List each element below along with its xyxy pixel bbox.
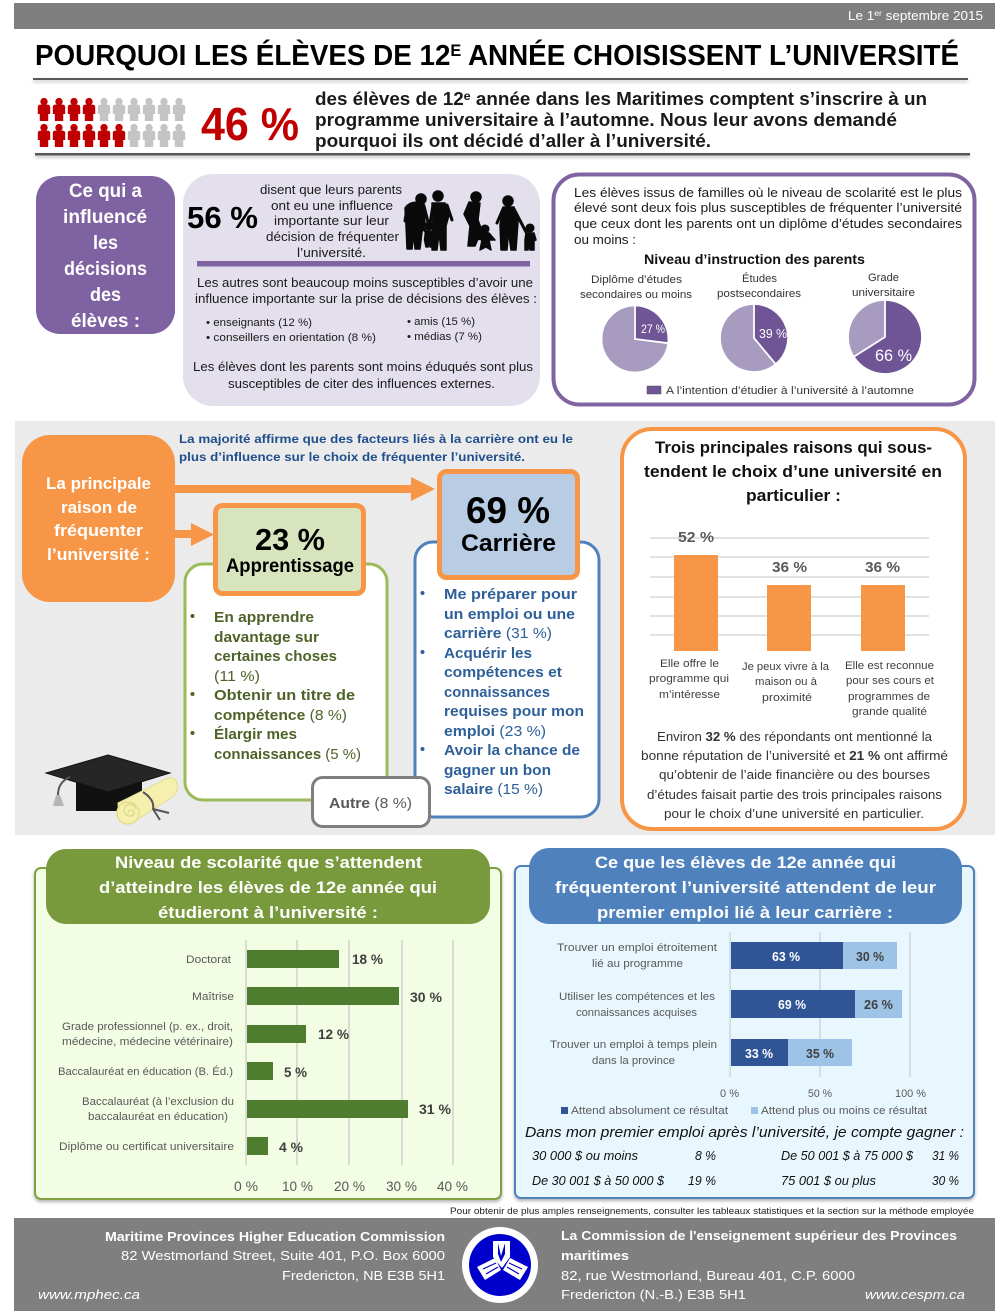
parents influence text <box>260 183 402 260</box>
career list: connaissances <box>444 684 550 701</box>
bar chart: expected education: 5 % <box>284 1064 308 1080</box>
bar chart: reasons: maison ou à <box>755 676 818 688</box>
panel: first job expectations <box>515 848 974 1198</box>
stacked bar chart: job expectations: 33 % <box>745 1047 773 1061</box>
learning list: certaines choses <box>214 648 337 665</box>
bar chart: expected education: 30 % <box>386 1179 417 1194</box>
bar chart: reasons: 36 % <box>772 560 807 576</box>
chart legend: Attend plus ou moins ce résultat <box>761 1105 927 1117</box>
bar chart: expected education: 0 % <box>234 1179 258 1194</box>
bar chart: reasons: Elle est reconnue <box>845 660 934 672</box>
learning list <box>190 609 361 763</box>
panel: main reason <box>22 435 175 602</box>
salary expectations table <box>532 1149 959 1188</box>
career heading box: 69 % <box>466 490 550 531</box>
reputation and financial aid text: qu’obtenir de l’aide financière ou des bourses <box>659 768 930 782</box>
stacked bar chart: job expectations: Trouver un emploi étroitement <box>557 942 717 954</box>
title: ANNÉE CHOISISSENT L’UNIVERSITÉ <box>461 38 959 72</box>
stacked bar chart: job expectations: 0 % <box>720 1088 739 1100</box>
career list <box>420 586 584 798</box>
stacked bar chart: job expectations: 69 % <box>778 998 806 1012</box>
learning list: davantage sur <box>214 629 319 646</box>
icon: commission logo <box>462 1227 538 1303</box>
bar chart: expected education: Maîtrise <box>192 991 234 1003</box>
intro text: des élèves de 12 <box>315 89 457 109</box>
chart legend: Attend absolument ce résultat <box>571 1105 728 1117</box>
panel heading: premier emploi lié à leur carrière : <box>597 904 893 922</box>
arrow: to career <box>175 477 435 501</box>
panel: learning <box>185 506 387 800</box>
career list: Acquérir les <box>444 645 532 662</box>
header bar with date <box>14 3 995 29</box>
pie charts heading: Niveau d’instruction des parents <box>644 251 865 267</box>
panel heading: d’atteindre les élèves de 12e année qui <box>99 879 437 897</box>
stacked bar chart: job expectations: 30 % <box>856 950 884 964</box>
stacked bar chart: job expectations: 63 % <box>772 950 800 964</box>
parents influence text: disent que leurs parents <box>260 183 402 197</box>
panel heading <box>529 848 962 924</box>
bar chart: reasons: grande qualité <box>852 706 927 718</box>
parents influence text: décision de fréquenter <box>266 230 399 244</box>
career list: requises pour mon <box>444 703 584 720</box>
stacked bar chart: job expectations: dans la province <box>592 1055 675 1067</box>
intro text: année dans les Maritimes comptent s’inscrire à un <box>471 89 927 109</box>
career list: emploi (23 %) <box>444 723 546 740</box>
list of other influences: • amis (15 %) <box>407 316 475 328</box>
chart legend <box>561 1105 927 1117</box>
panel: influences <box>183 174 540 406</box>
panel heading <box>46 849 490 924</box>
icon: people pictogram, 46 percent <box>38 98 185 147</box>
pie chart 27 percent <box>602 306 668 372</box>
other influences text: influence importante sur la prise de décisions des élèves : <box>195 292 537 306</box>
list of other influences: • médias (7 %) <box>407 331 482 343</box>
stacked bar chart: job expectations: lié au programme <box>592 958 683 970</box>
French contact details: 82, rue Westmorland, Bureau 401, C.P. 6000 <box>561 1268 855 1283</box>
French contact details: maritimes <box>561 1248 629 1263</box>
learning heading box <box>216 506 364 594</box>
learning list: En apprendre <box>214 609 314 626</box>
bar chart: reasons: 36 % <box>865 560 900 576</box>
bar chart: reasons: programme qui <box>649 673 729 685</box>
title: E <box>450 41 461 60</box>
panel: main reason: l’université : <box>47 545 150 564</box>
bar chart: expected education: 40 % <box>437 1179 468 1194</box>
panel heading <box>644 439 942 505</box>
English contact details: 82 Westmorland Street, Suite 401, P.O. Box 6000 <box>121 1248 445 1263</box>
bar chart: expected education: médecine, médecine vétérinaire) <box>62 1036 233 1048</box>
panel: what influenced students heading: des <box>90 285 121 306</box>
career list: compétences et <box>444 664 562 681</box>
bar chart: expected education: 12 % <box>318 1026 350 1042</box>
reputation and financial aid text: Environ 32 % des répondants ont mentionné la <box>657 730 932 744</box>
parental education text <box>574 186 962 247</box>
career list: gagner un bon <box>444 762 551 779</box>
intro text: programme universitaire à l’automne. Nous leur avons demandé <box>315 110 897 130</box>
career heading box <box>440 472 578 578</box>
other reasons box <box>312 778 430 826</box>
stacked bar chart: job expectations: Utiliser les compétences et les <box>559 991 716 1003</box>
other influences text: Les autres sont beaucoup moins susceptibles d’avoir une <box>197 276 533 290</box>
pie labels <box>580 272 915 301</box>
pie labels: secondaires ou moins <box>580 289 693 301</box>
parental education text: Les élèves issus de familles où le niveau de scolarité est le plus <box>574 186 962 200</box>
pie chart 66 percent <box>848 300 922 374</box>
panel heading: particulier : <box>746 487 841 505</box>
bar chart: expected education: 30 % <box>410 989 443 1005</box>
parents influence text: l’université. <box>297 246 366 260</box>
statistic 56 percent: 56 % <box>187 200 258 235</box>
bar chart: reasons: pour ses cours et <box>846 675 934 687</box>
career list: salaire (15 %) <box>444 781 543 798</box>
panel: main reason: fréquenter <box>54 521 143 540</box>
salary expectations table: 75 001 $ ou plus <box>781 1174 876 1188</box>
bar chart: expected education: 31 % <box>419 1101 452 1117</box>
learning list: connaissances (5 %) <box>214 746 361 763</box>
intro text: e <box>464 89 471 103</box>
stacked bar chart: job expectations: 26 % <box>864 998 893 1012</box>
bar chart: expected education: Baccalauréat (à l’exclusion du <box>82 1096 234 1108</box>
panel heading: étudieront à l’université : <box>158 904 378 922</box>
pie labels: postsecondaires <box>717 288 802 300</box>
bar chart: reasons <box>649 530 934 718</box>
salary expectations table: 19 % <box>688 1174 716 1188</box>
English contact details: Maritime Provinces Higher Education Commission <box>105 1229 445 1244</box>
parental education text: ou moins : <box>574 233 636 247</box>
bar chart: reasons: programmes de <box>848 691 930 703</box>
learning heading box: Apprentissage <box>226 556 354 577</box>
salary expectations table: 31 % <box>932 1149 959 1163</box>
panel: main reason: raison de <box>61 498 137 517</box>
stacked bar chart: job expectations: 35 % <box>806 1047 834 1061</box>
list of other influences: • enseignants (12 %) <box>206 317 312 329</box>
reputation and financial aid text: d’études faisait partie des trois principales raisons <box>647 788 942 802</box>
bar chart: expected education: Grade professionnel (p. ex., droit, <box>62 1021 233 1033</box>
panel: top reasons for choosing a university <box>622 429 965 829</box>
bar chart: expected education: 4 % <box>279 1139 304 1155</box>
bar chart: expected education <box>58 940 468 1194</box>
panel: what influenced students heading: influencé <box>63 207 147 228</box>
English contact details <box>38 1229 445 1302</box>
headline statistic 46 percent: 46 % <box>201 98 299 150</box>
list of other influences <box>206 316 482 344</box>
career list: Avoir la chance de <box>444 742 580 759</box>
bar chart: reasons: m’intéresse <box>659 689 720 701</box>
bar chart: expected education: 20 % <box>334 1179 365 1194</box>
panel: grey section background <box>15 421 995 835</box>
panel: main reason: La principale <box>46 474 151 493</box>
pie labels: Diplôme d’études <box>591 274 683 286</box>
pie labels: universitaire <box>852 287 915 299</box>
bar chart: expected education: Doctorat <box>186 954 231 966</box>
parents influence text: ont eu une influence <box>271 199 393 213</box>
bar chart: expected education: 18 % <box>352 951 384 967</box>
other influences text <box>195 276 537 306</box>
header bar with date: septembre 2015 <box>882 9 983 23</box>
title <box>33 38 968 80</box>
bar chart: expected education: baccalauréat en éducation) <box>88 1111 228 1123</box>
salary expectations table: 30 % <box>932 1174 959 1188</box>
footnote: Pour obtenir de plus amples renseignements, consulter les tableaux statistiques et la section sur la méthode employée <box>450 1206 974 1217</box>
bar chart: expected education: 10 % <box>282 1179 313 1194</box>
career list: Me préparer pour <box>444 586 577 603</box>
panel heading: tendent le choix d’une université en <box>644 463 942 481</box>
salary expectations table: 30 000 $ ou moins <box>532 1149 638 1163</box>
panel: what influenced students heading <box>36 176 175 334</box>
icon: graduation cap and diploma <box>46 755 177 824</box>
learning heading box: 23 % <box>255 522 325 557</box>
parental education text: élevé sont deux fois plus susceptibles de fréquenter l’université <box>574 201 962 215</box>
panel: parental education <box>554 174 974 404</box>
pie legend: A l’intention d’étudier à l’université à l’automne <box>666 385 914 397</box>
parents influence text: importante sur leur <box>274 214 389 228</box>
salary expectations table: 8 % <box>695 1149 716 1163</box>
reputation and financial aid text <box>641 730 948 821</box>
career majority note <box>179 432 573 464</box>
intro text: pourquoi ils ont décidé d’aller à l’université. <box>315 131 711 151</box>
external influences note: susceptibles de citer des influences externes. <box>228 377 495 391</box>
external influences note: Les élèves dont les parents sont moins éduqués sont plus <box>193 360 533 374</box>
panel: what influenced students heading: élèves : <box>71 311 140 332</box>
panel heading: Ce que les élèves de 12e année qui <box>595 854 896 872</box>
salary expectations table: De 30 001 $ à 50 000 $ <box>532 1174 665 1188</box>
panel: career <box>415 472 599 817</box>
panel: expected level of education <box>35 849 501 1199</box>
learning list: Élargir mes <box>214 726 297 743</box>
bar chart: expected education: Baccalauréat en éducation (B. Éd.) <box>58 1065 233 1078</box>
learning list: Obtenir un titre de <box>214 687 355 704</box>
panel: what influenced students heading: décisions <box>64 259 147 280</box>
reputation and financial aid text: pour le choix d’une université en particulier. <box>664 807 924 821</box>
pie chart 39 percent <box>720 304 788 372</box>
panel heading: Niveau de scolarité que s’attendent <box>115 854 423 872</box>
stacked bar chart: job expectations: connaissances acquises <box>576 1007 697 1019</box>
English contact details: www.mphec.ca <box>38 1287 140 1302</box>
stacked bar chart: job expectations: 50 % <box>808 1088 832 1100</box>
career list: carrière (31 %) <box>444 625 552 642</box>
stacked bar chart: job expectations <box>550 932 927 1117</box>
English contact details: Fredericton, NB E3B 5H1 <box>282 1268 445 1283</box>
other reasons box: Autre (8 %) <box>329 795 412 812</box>
pie chart 27 percent: 27 % <box>641 324 665 336</box>
footer <box>14 1218 995 1311</box>
panel: what influenced students heading: Ce qui a <box>69 181 142 202</box>
bar chart: reasons: Elle offre le <box>660 658 719 670</box>
pie labels: Études <box>742 272 778 285</box>
bar chart: reasons: 52 % <box>678 530 714 546</box>
panel heading: Trois principales raisons qui sous- <box>655 439 932 457</box>
career heading box: Carrière <box>461 530 556 557</box>
icon: family silhouettes <box>405 191 536 250</box>
external influences note <box>193 360 533 391</box>
stacked bar chart: job expectations: Trouver un emploi à temps plein <box>550 1039 717 1051</box>
pie chart 66 percent: 66 % <box>875 346 912 365</box>
career list: un emploi ou une <box>444 606 575 623</box>
learning list: (11 %) <box>214 668 260 685</box>
French contact details: www.cespm.ca <box>865 1287 965 1302</box>
French contact details <box>561 1228 965 1302</box>
bar chart: reasons: Je peux vivre à la <box>742 661 830 673</box>
bar chart: expected education: Diplôme ou certificat universitaire <box>59 1141 234 1153</box>
salary expectations heading: Dans mon premier emploi après l’université, je compte gagner : <box>525 1124 964 1141</box>
stacked bar chart: job expectations: 100 % <box>895 1088 926 1100</box>
header bar with date: er <box>874 9 882 18</box>
reputation and financial aid text: bonne réputation de l’université et 21 % ont affirmé <box>641 749 948 763</box>
intro text <box>35 89 970 156</box>
panel heading: fréquenteront l’université attendent de leur <box>555 879 937 897</box>
learning list: compétence (8 %) <box>214 707 347 724</box>
panel: what influenced students heading: les <box>93 233 118 254</box>
list of other influences: • conseillers en orientation (8 %) <box>206 332 376 344</box>
bar chart: reasons: proximité <box>762 692 812 704</box>
pie chart 39 percent: 39 % <box>759 326 787 341</box>
career majority note: plus d’influence sur le choix de fréquenter l’université. <box>179 450 525 464</box>
title: POURQUOI LES ÉLÈVES DE 12 <box>35 40 468 72</box>
French contact details: Fredericton (N.-B.) E3B 5H1 <box>561 1287 746 1302</box>
pie labels: Grade <box>868 272 899 284</box>
salary expectations table: De 50 001 $ à 75 000 $ <box>781 1149 914 1163</box>
arrow: to learning <box>175 523 214 546</box>
French contact details: La Commission de l'enseignement supérieur des Provinces <box>561 1228 957 1243</box>
parental education text: que ceux dont les parents ont un diplôme d’études secondaires <box>574 217 962 231</box>
header bar with date: Le 1 <box>848 9 872 23</box>
career majority note: La majorité affirme que des facteurs liés à la carrière ont eu le <box>179 432 573 446</box>
